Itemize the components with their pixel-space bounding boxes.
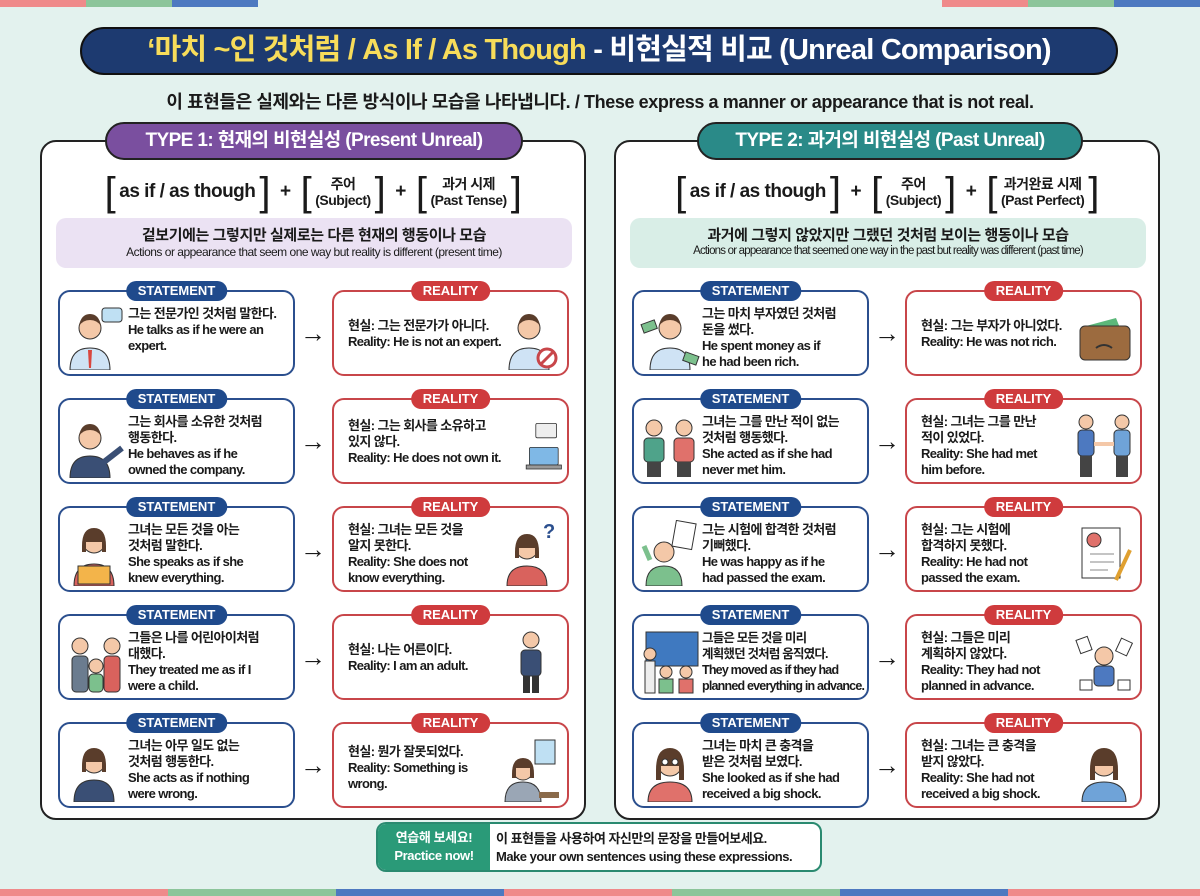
reality 1-3: 현실: 그녀는 모든 것을 — [348, 522, 463, 537]
formula: type 2: as if / as though — [690, 181, 826, 202]
statement 2-3 — [632, 506, 869, 592]
statement 1-3: 그녀는 모든 것을 아는 — [128, 522, 239, 537]
statement 2-5: She looked as if she had — [702, 770, 839, 785]
statement 1-2: 행동한다. — [128, 430, 176, 445]
statement 2-2: 그녀는 그를 만난 적이 없는 — [702, 414, 839, 429]
reality 2-5: Reality: She had not — [921, 770, 1034, 785]
arrow: → — [874, 318, 900, 348]
statement 1-2 — [58, 398, 295, 484]
formula: type 2: 과거완료 시제 — [1004, 176, 1081, 192]
statement 1-1: He talks as if he were an expert. — [128, 322, 263, 353]
practice callout: Practice now! — [394, 848, 474, 863]
formula: type 1: [ — [416, 170, 426, 214]
reality 2-1: 현실: 그는 부자가 아니었다. — [921, 318, 1062, 333]
practice callout: 이 표현들을 사용하여 자신만의 문장을 만들어보세요. — [496, 831, 767, 846]
reality 2-2: 적이 있었다. — [921, 430, 984, 445]
statement 1-4: 그들은 나를 어린아이처럼 — [128, 630, 259, 645]
description: type 1: Actions or appearance that seem one way but reality is different (present time) — [126, 245, 502, 259]
reality 2-2 — [905, 398, 1142, 484]
statement 1-4: were a child. — [128, 678, 198, 693]
statement 2-1: STATEMENT — [712, 283, 789, 298]
reality 1-2 — [332, 398, 569, 484]
statement 2-5: received a big shock. — [702, 786, 821, 801]
reality 1-3: Reality: She does not — [348, 554, 468, 569]
reality 1-4: 현실: 나는 어른이다. — [348, 642, 452, 657]
statement 2-5: STATEMENT — [712, 715, 789, 730]
reality 2-3: 현실: 그는 시험에 — [921, 522, 1010, 537]
statement 2-3: 기뻐했다. — [702, 538, 750, 553]
statement 2-2: STATEMENT — [712, 391, 789, 406]
formula: type 2: (Past Perfect) — [1001, 192, 1084, 208]
reality 2-3 — [905, 506, 1142, 592]
statement 2-5 — [632, 722, 869, 808]
reality 2-5: 현실: 그녀는 큰 충격을 — [921, 738, 1036, 753]
reality 2-5: received a big shock. — [921, 786, 1040, 801]
statement 2-4 — [632, 614, 869, 700]
description: type 2: 과거에 그렇지 않았지만 그랬던 것처럼 보이는 행동이나 모습 — [707, 227, 1069, 244]
arrow: → — [300, 318, 326, 348]
statement 2-4: 그들은 모든 것을 미리 — [702, 631, 806, 645]
formula: type 1 — [105, 170, 521, 214]
reality 2-3: Reality: He had not — [921, 554, 1027, 569]
reality 2-4 — [905, 614, 1142, 700]
statement 2-2: She acted as if she had — [702, 446, 832, 461]
statement 2-2 — [632, 398, 869, 484]
arrow: → — [300, 426, 326, 456]
formula: type 2: (Subject) — [886, 192, 941, 208]
formula: type 2: + — [850, 181, 861, 202]
title — [80, 27, 1118, 75]
reality 1-5 — [332, 722, 569, 808]
reality 1-3 — [332, 506, 569, 592]
reality 2-2: REALITY — [996, 391, 1051, 406]
reality 2-5: 받지 않았다. — [921, 754, 984, 769]
statement 2-3: 그는 시험에 합격한 것처럼 — [702, 522, 836, 537]
statement 2-1: 돈을 썼다. — [702, 322, 753, 337]
statement 1-5: 것처럼 행동한다. — [128, 754, 214, 769]
statement 2-4: 계획했던 것처럼 움직였다. — [702, 647, 828, 661]
formula: type 1: + — [280, 181, 291, 202]
tab: type 1: TYPE 1: 현재의 비현실성 (Present Unreal) — [146, 130, 482, 151]
reality 1-3: know everything. — [348, 570, 445, 585]
statement 2-5: 받은 것처럼 보였다. — [702, 754, 802, 769]
reality 1-1: 현실: 그는 전문가가 아니다. — [348, 318, 489, 333]
statement 2-2: never met him. — [702, 462, 785, 477]
reality 1-4: Reality: I am an adult. — [348, 658, 468, 673]
reality 1-3: ? — [543, 521, 555, 543]
reality 2-2: Reality: She had met — [921, 446, 1037, 461]
reality 1-4 — [332, 614, 569, 700]
formula: type 2: ] — [945, 170, 956, 214]
reality 2-5 — [905, 722, 1142, 808]
formula: type 1: ] — [511, 170, 521, 214]
statement 2-4: They moved as if they had — [702, 663, 838, 677]
formula: type 2: + — [966, 181, 976, 202]
reality 2-1 — [905, 290, 1142, 376]
arrow: → — [874, 750, 900, 780]
reality 2-4: planned in advance. — [921, 678, 1034, 693]
reality 2-3: 합격하지 못했다. — [921, 538, 1007, 553]
statement 1-1 — [58, 290, 295, 376]
arrow: → — [874, 642, 900, 672]
formula: type 1: 과거 시제 — [442, 176, 495, 192]
reality 2-4: 현실: 그들은 미리 — [921, 630, 1010, 645]
reality 2-4: REALITY — [996, 607, 1051, 622]
arrow: → — [874, 534, 900, 564]
statement 1-5: were wrong. — [128, 786, 197, 801]
tab: type 2: TYPE 2: 과거의 비현실성 (Past Unreal) — [735, 130, 1045, 151]
statement 2-2: 것처럼 행동했다. — [702, 430, 788, 445]
formula: type 1: [ — [105, 170, 115, 214]
reality 2-3: passed the exam. — [921, 570, 1020, 585]
reality 1-2: REALITY — [423, 391, 478, 406]
formula: type 2: ] — [1088, 170, 1099, 214]
statement 2-4: STATEMENT — [712, 607, 789, 622]
statement 1-1: 그는 전문가인 것처럼 말한다. — [128, 306, 276, 321]
statement 2-1 — [632, 290, 869, 376]
reality 1-1: REALITY — [423, 283, 478, 298]
statement 2-1: He spent money as if — [702, 338, 820, 353]
reality 1-4: REALITY — [423, 607, 478, 622]
formula: type 2: 주어 — [901, 176, 926, 192]
statement 2-1: 그는 마치 부자였던 것처럼 — [702, 306, 836, 321]
statement 1-3: She speaks as if she — [128, 554, 243, 569]
formula: type 2: [ — [871, 170, 882, 214]
formula: type 2: [ — [986, 170, 997, 214]
panel: type 1 — [40, 140, 586, 820]
reality 2-1: REALITY — [996, 283, 1051, 298]
practice callout: 연습해 보세요! — [396, 830, 472, 845]
formula: type 1: + — [395, 181, 406, 202]
arrow: → — [300, 534, 326, 564]
formula: type 1: ] — [375, 170, 385, 214]
arrow: → — [300, 642, 326, 672]
statement 1-2: He behaves as if he — [128, 446, 237, 461]
tab: type 1 — [105, 122, 523, 160]
statement 1-5: She acts as if nothing — [128, 770, 249, 785]
statement 2-3: STATEMENT — [712, 499, 789, 514]
statement 1-4 — [58, 614, 295, 700]
formula: type 1: (Subject) — [315, 192, 371, 208]
formula: type 1: ] — [259, 170, 270, 214]
reality 1-5: Reality: Something is — [348, 760, 468, 775]
reality 1-2: Reality: He does not own it. — [348, 450, 501, 465]
reality 2-3: REALITY — [996, 499, 1051, 514]
description: type 2: Actions or appearance that seemed one way in the past but reality was different (past time) — [693, 245, 1083, 257]
statement 1-5 — [58, 722, 295, 808]
reality 1-1: Reality: He is not an expert. — [348, 334, 501, 349]
reality 2-4: Reality: They had not — [921, 662, 1040, 677]
formula: type 1: as if / as though — [119, 181, 255, 202]
statement 2-5: 그녀는 마치 큰 충격을 — [702, 738, 813, 753]
description: type 2 — [630, 218, 1146, 268]
practice callout — [376, 822, 822, 872]
statement 1-4: 대했다. — [128, 646, 165, 661]
formula: type 1: (Past Tense) — [430, 192, 507, 208]
reality 1-2: 있지 않다. — [348, 434, 399, 449]
statement 1-3 — [58, 506, 295, 592]
reality 1-5: REALITY — [423, 715, 478, 730]
formula: type 1: 주어 — [331, 176, 355, 192]
practice callout: Make your own sentences using these expressions. — [496, 849, 792, 864]
description: type 1 — [56, 218, 572, 268]
statement 1-5: 그녀는 아무 일도 없는 — [128, 738, 239, 753]
statement 1-4: STATEMENT — [138, 607, 215, 622]
reality 2-2: him before. — [921, 462, 984, 477]
statement 2-3: He was happy as if he — [702, 554, 825, 569]
statement 2-4: planned everything in advance. — [702, 679, 864, 693]
arrow: → — [300, 750, 326, 780]
reality 1-2: 현실: 그는 회사를 소유하고 — [348, 418, 486, 433]
statement 2-3: had passed the exam. — [702, 570, 825, 585]
statement 1-3: STATEMENT — [138, 499, 215, 514]
formula: type 2 — [675, 170, 1099, 214]
statement 1-3: knew everything. — [128, 570, 224, 585]
reality 1-5: wrong. — [348, 776, 387, 791]
title: ‘마치 ~인 것처럼 / As If / As Though - 비현실적 비교 (Unreal Comparison) — [147, 34, 1051, 66]
statement 1-1: STATEMENT — [138, 283, 215, 298]
reality 1-3: REALITY — [423, 499, 478, 514]
statement 1-3: 것처럼 말한다. — [128, 538, 202, 553]
statement 1-2: owned the company. — [128, 462, 245, 477]
panel: type 2 — [614, 140, 1160, 820]
reality 1-1 — [332, 290, 569, 376]
reality 1-3: 알지 못한다. — [348, 538, 411, 553]
reality 2-4: 계획하지 않았다. — [921, 646, 1007, 661]
statement 1-2: STATEMENT — [138, 391, 215, 406]
formula: type 2: ] — [830, 170, 840, 214]
reality 2-5: REALITY — [996, 715, 1051, 730]
reality 1-5: 현실: 뭔가 잘못되었다. — [348, 744, 463, 759]
reality 2-2: 현실: 그녀는 그를 만난 — [921, 414, 1036, 429]
statement 1-2: 그는 회사를 소유한 것처럼 — [128, 414, 262, 429]
arrow: → — [874, 426, 900, 456]
formula: type 2: [ — [675, 170, 686, 214]
description: type 1: 겉보기에는 그렇지만 실제로는 다른 현재의 행동이나 모습 — [142, 227, 486, 244]
subtitle: 이 표현들은 실제와는 다른 방식이나 모습을 나타냅니다. / These express a manner or appearance that is not real. — [166, 92, 1034, 112]
tab: type 2 — [697, 122, 1083, 160]
statement 2-1: he had been rich. — [702, 354, 799, 369]
formula: type 1: [ — [301, 170, 311, 214]
reality 2-1: Reality: He was not rich. — [921, 334, 1056, 349]
statement 1-4: They treated me as if I — [128, 662, 251, 677]
statement 1-5: STATEMENT — [138, 715, 215, 730]
